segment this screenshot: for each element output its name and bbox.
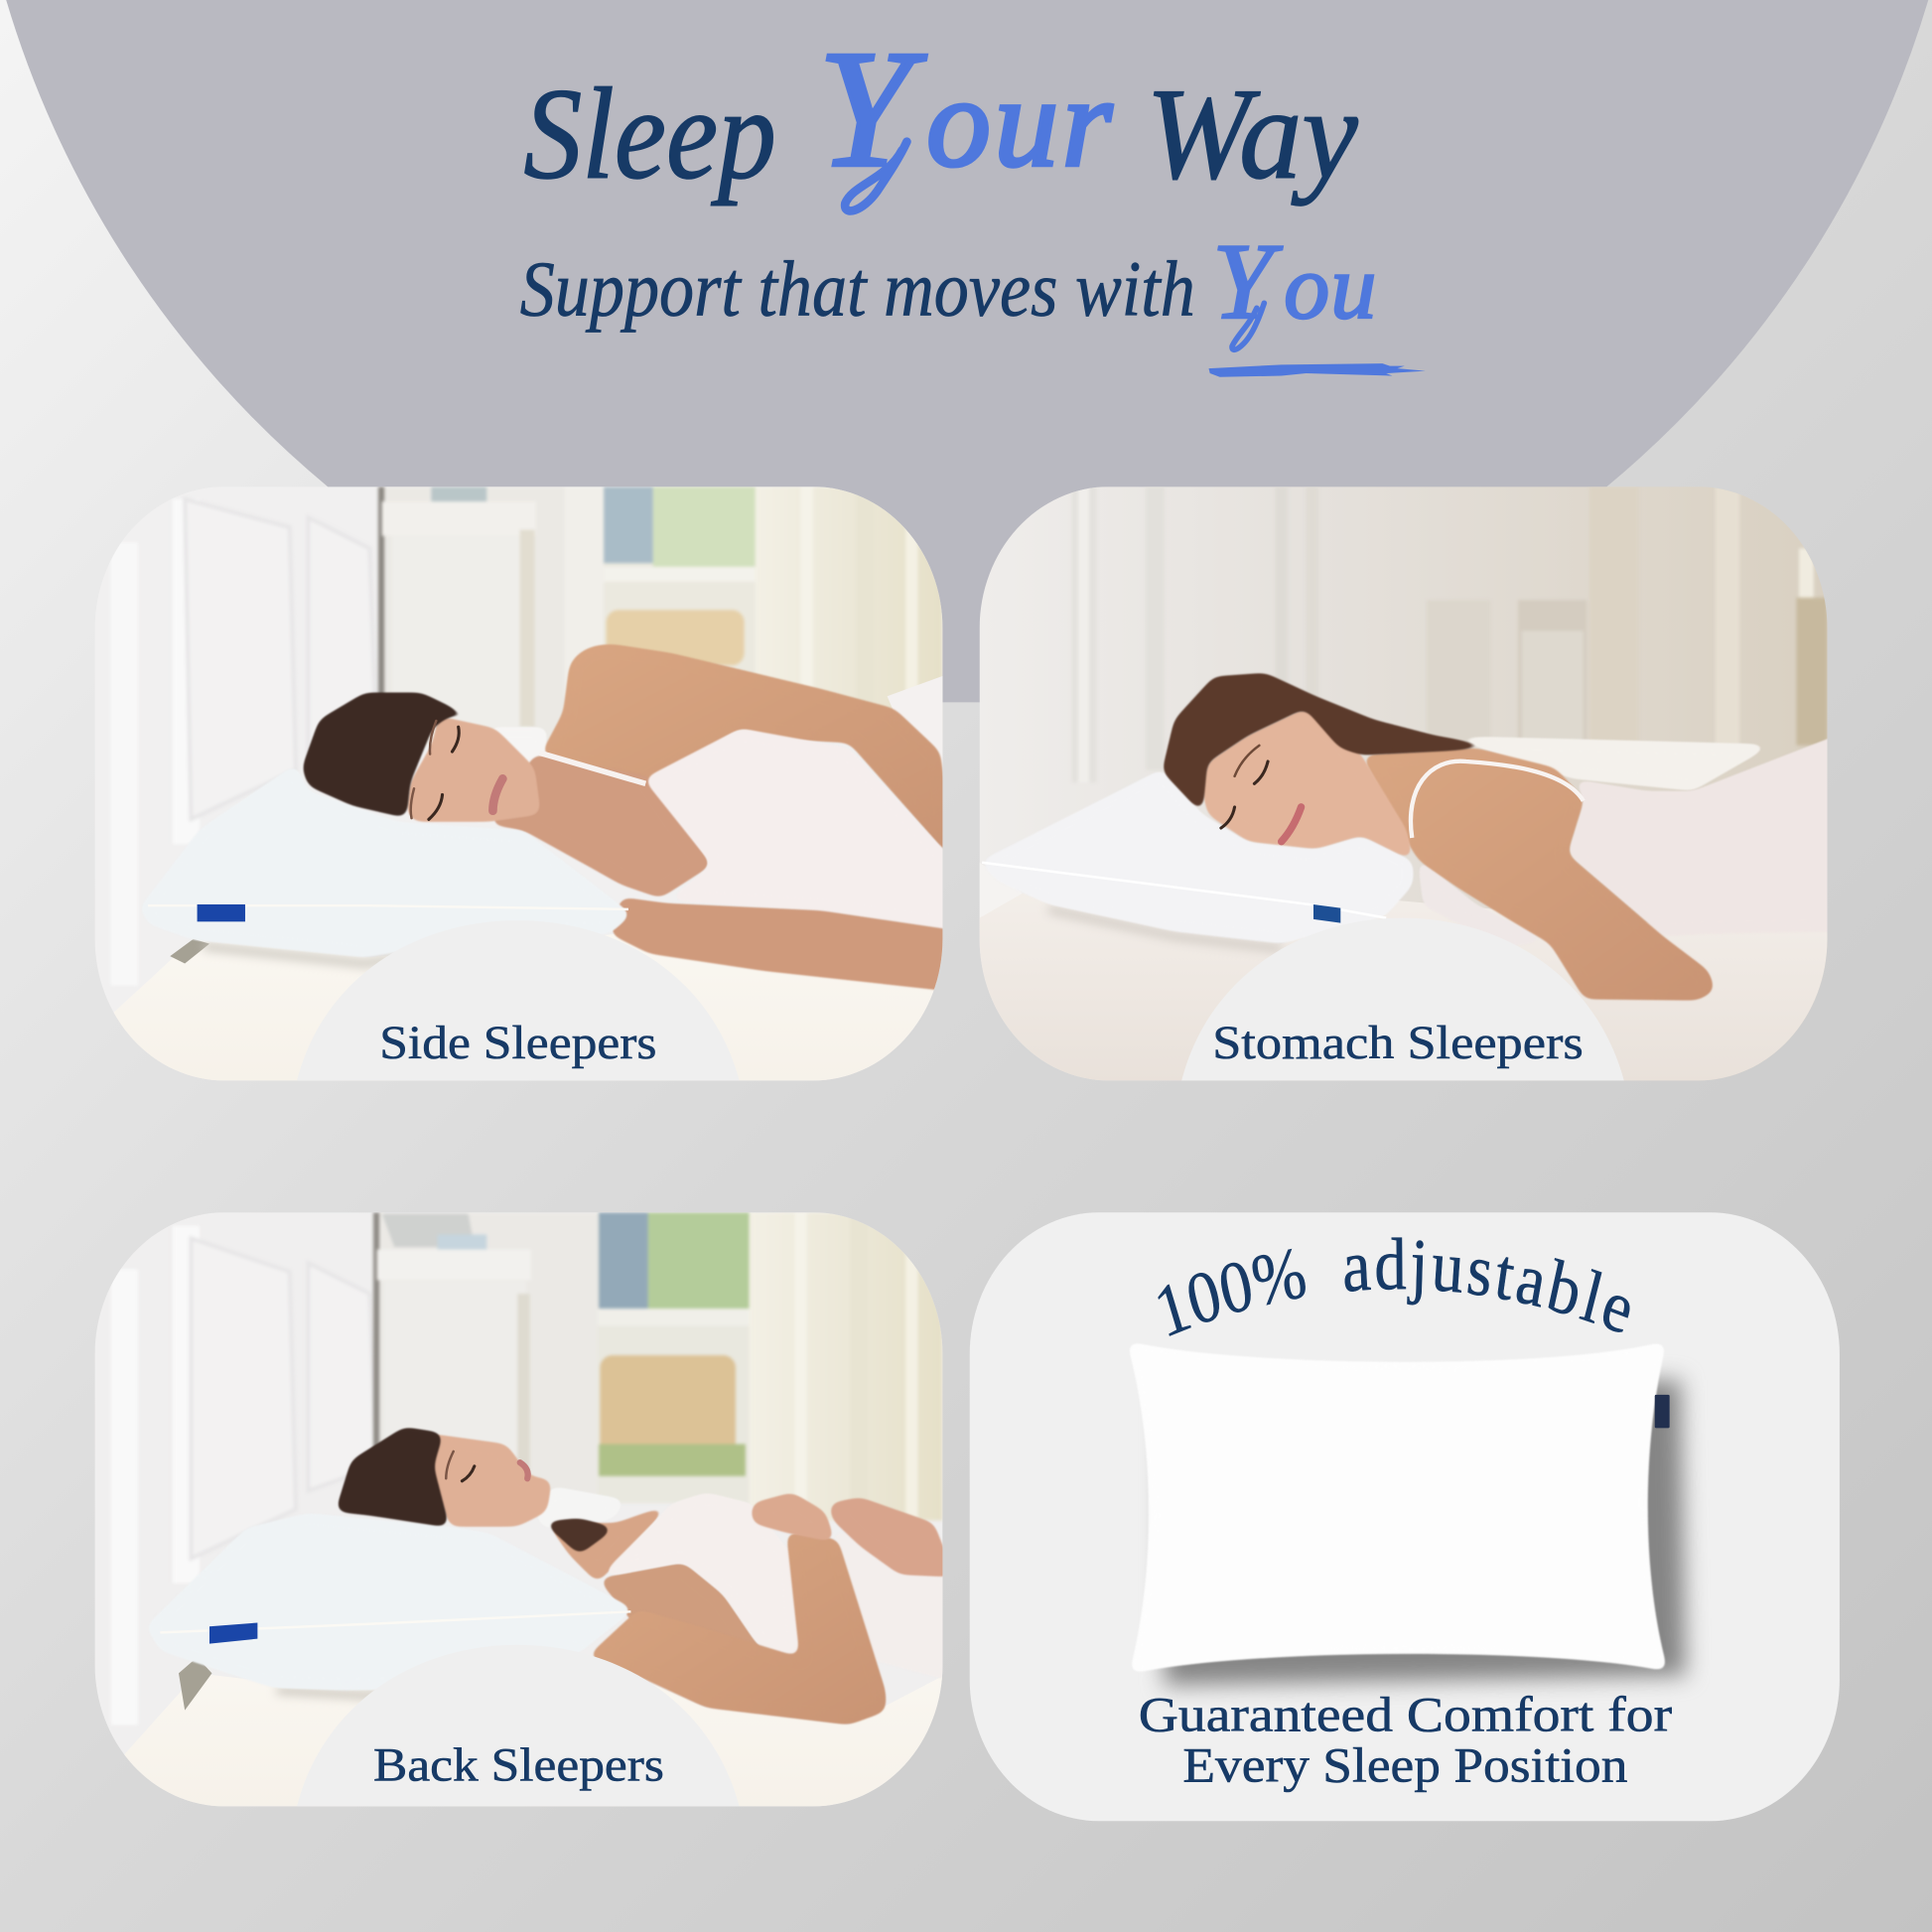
label dome: stomach sleepers: [1181, 918, 1624, 1080]
label dome: back sleepers: Back Sleepers: [373, 1739, 664, 1791]
header shape: [6, 0, 1928, 702]
caption: Every Sleep Position: [1182, 1738, 1628, 1793]
photo subject: woman lying on her stomach on a pillow: [967, 673, 1842, 1097]
label dome: side sleepers: Side Sleepers: [379, 1018, 656, 1069]
subtitle: Support that moves with: [520, 246, 1195, 334]
title: [523, 63, 1358, 207]
photo subject: woman lying on her back on a pillow: [86, 1427, 955, 1824]
label dome: stomach sleepers: Stomach Sleepers: [1212, 1018, 1584, 1069]
title accent: Your: our: [926, 51, 1116, 193]
subtitle accent: You: [1212, 221, 1378, 349]
panel: stomach sleepers: [967, 486, 1842, 1097]
panel: side sleepers: [86, 486, 955, 1097]
facial features: [1221, 746, 1302, 842]
title: Sleep: [523, 63, 776, 207]
caption: [1139, 1688, 1673, 1793]
photo subject: woman lying on her side on a pillow: [86, 644, 955, 1097]
title accent: Your: [818, 16, 1116, 210]
subtitle accent: You: ou: [1284, 236, 1378, 338]
room backdrop: wall mouldings, doors, curtain: [1072, 486, 1828, 782]
facial features: [411, 721, 502, 819]
pillow: [1126, 1340, 1668, 1675]
title: Way: [1146, 63, 1358, 207]
room backdrop: wall panels, cabinet, window and curtain: [111, 1212, 942, 1725]
caption: Guaranteed Comfort for: [1139, 1688, 1673, 1742]
pillow shadow: [1165, 1380, 1686, 1686]
facial features: [446, 1451, 528, 1481]
room backdrop: wall panels, cabinet, window and curtain: [111, 486, 942, 986]
pillow tag: [1655, 1395, 1670, 1428]
panel: adjustable pillow: [969, 1212, 1840, 1821]
subtitle accent: You: Y: [1212, 221, 1283, 342]
panel: back sleepers: [86, 1212, 955, 1824]
label dome: back sleepers: [297, 1645, 740, 1806]
label dome: side sleepers: [297, 920, 740, 1080]
title accent: Your: Y: [818, 16, 926, 202]
curved heading: 100% adjustable: [1158, 1237, 1630, 1336]
brush underline: [1208, 363, 1426, 377]
